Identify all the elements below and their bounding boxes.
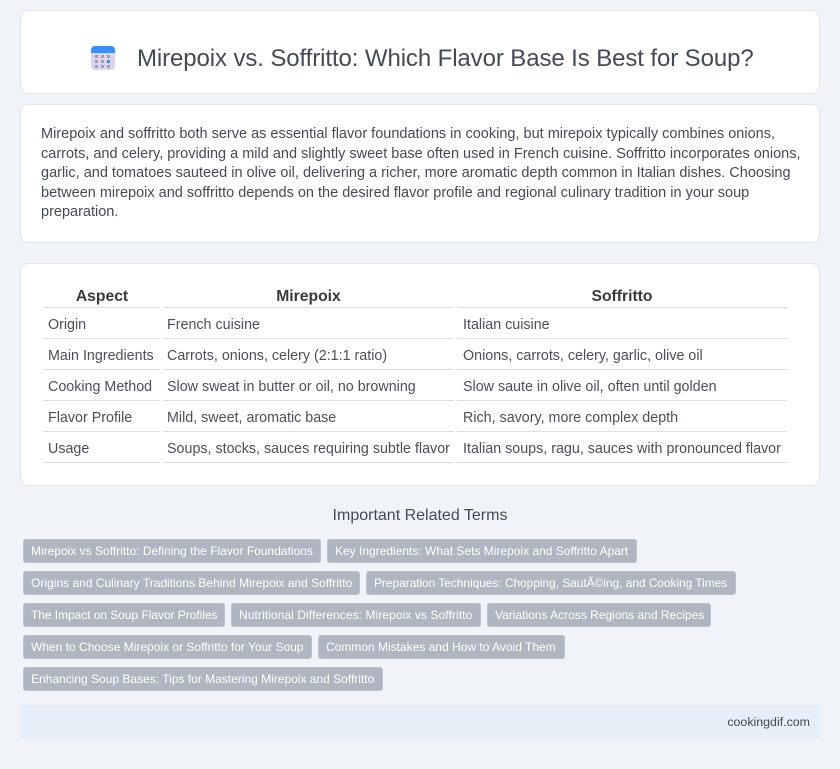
footer source: cookingdif.com	[727, 715, 810, 729]
chip	[231, 603, 481, 627]
chip: The Impact on Soup Flavor Profiles	[31, 608, 217, 622]
intro text: between mirepoix and soffritto depends on the desired flavor profile and regional culinary tradition in your soup	[41, 184, 749, 200]
cell: Italian soups, ragu, sauces with pronounced flavor	[463, 441, 781, 457]
chip	[23, 539, 321, 563]
row: Usage: Usage	[48, 441, 89, 457]
intro text: Mirepoix and soffritto both serve as essential flavor foundations in cooking, but mirepoix typically combines onions,	[41, 126, 775, 142]
footer bar	[20, 705, 820, 739]
intro card	[20, 104, 820, 243]
intro text: garlic, and tomatoes sauteed in olive oil, delivering a richer, more aromatic depth common in Italian dishes. Choosing	[41, 165, 791, 181]
cell: Slow saute in olive oil, often until golden	[463, 379, 717, 395]
related terms heading: Important Related Terms	[333, 507, 507, 524]
cell: Carrots, onions, celery (2:1:1 ratio)	[167, 348, 387, 364]
intro text	[41, 126, 801, 220]
chip: Mirepoix vs Soffritto: Defining the Flavor Foundations	[31, 544, 313, 558]
chip: When to Choose Mirepoix or Soffritto for Your Soup	[31, 640, 304, 654]
cell: Onions, carrots, celery, garlic, olive oil	[463, 348, 703, 364]
chip	[327, 539, 637, 563]
chip: Origins and Culinary Traditions Behind Mirepoix and Soffritto	[31, 576, 352, 590]
cell: Slow sweat in butter or oil, no browning	[167, 379, 416, 395]
cell: Rich, savory, more complex depth	[463, 410, 678, 426]
chip	[318, 635, 565, 659]
chip: Nutritional Differences: Mirepoix vs Soffritto	[239, 608, 472, 622]
chip: Key Ingredients: What Sets Mirepoix and Soffritto Apart	[335, 544, 628, 558]
chip	[23, 571, 360, 595]
intro text: preparation.	[41, 204, 118, 220]
cell: Italian cuisine	[463, 317, 550, 333]
table header: Aspect: Aspect	[76, 288, 128, 305]
row: Main Ingredients: Main Ingredients	[48, 348, 154, 364]
table header: Soffritto: Soffritto	[592, 288, 652, 305]
cell: Soups, stocks, sauces requiring subtle flavor	[167, 441, 450, 457]
chip: Enhancing Soup Bases: Tips for Mastering Mirepoix and Soffritto	[31, 672, 374, 686]
table header: Mirepoix: Mirepoix	[276, 288, 341, 305]
chip: Common Mistakes and How to Avoid Them	[326, 640, 556, 654]
row: Flavor Profile: Flavor Profile	[48, 410, 132, 426]
row: Cooking Method: Cooking Method	[48, 379, 152, 395]
chip: Variations Across Regions and Recipes	[495, 608, 704, 622]
chip	[487, 603, 711, 627]
chip	[23, 603, 225, 627]
comparison table card	[20, 263, 820, 486]
title: Mirepoix vs. Soffritto: Which Flavor Base Is Best for Soup?	[137, 45, 754, 72]
cell: French cuisine	[167, 317, 260, 333]
header card	[20, 10, 820, 94]
chip: Preparation Techniques: Chopping, SautÃ©ing, and Cooking Times	[374, 576, 727, 590]
row: Origin: Origin	[48, 317, 86, 333]
intro text: carrots, and celery, providing a mild and slightly sweet base often used in French cuisine. Soffritto incorporates onions,	[41, 146, 801, 162]
chip	[23, 667, 383, 691]
icon: calendar	[91, 46, 115, 70]
chip	[366, 571, 736, 595]
cell: Mild, sweet, aromatic base	[167, 410, 336, 426]
chip	[23, 635, 312, 659]
